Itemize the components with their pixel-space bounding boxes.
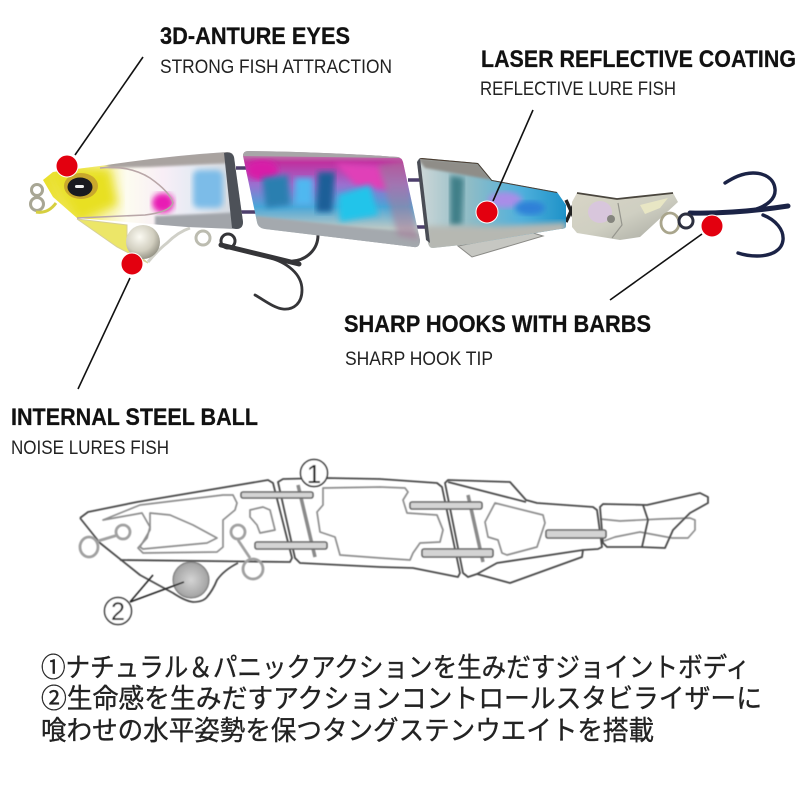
- eyelets: [80, 525, 263, 579]
- segment 3 outline: [445, 480, 602, 583]
- body segment 3: [417, 158, 566, 252]
- split ring front: [196, 231, 210, 245]
- tail segment: [572, 193, 678, 240]
- label 1: [300, 459, 328, 489]
- label 2 with leaders: 2: [111, 598, 125, 626]
- japanese description: ①ナチュラル＆パニックアクションを生みだすジョイントボディ: [41, 653, 750, 683]
- callout: laser coating: [476, 46, 796, 223]
- steel ball: [126, 225, 160, 259]
- callout: 3D eyes: STRONG FISH ATTRACTION: [160, 57, 392, 78]
- body segment 1: [43, 150, 245, 232]
- label 2 with leaders: [104, 575, 184, 626]
- lure photo: [30, 146, 788, 309]
- eye: [64, 173, 98, 199]
- segment 1 outline: [80, 480, 292, 602]
- callout: sharp hooks: SHARP HOOKS WITH BARBS: [344, 311, 651, 338]
- callout: sharp hooks: [344, 215, 723, 370]
- nose eyelet: [30, 184, 56, 212]
- weight ball: [173, 562, 209, 598]
- callout: 3D eyes: [56, 23, 392, 177]
- segment 2 outline: [278, 478, 460, 577]
- rear treble hook: [690, 173, 788, 256]
- joint rods: [236, 168, 576, 227]
- rear split rings: [661, 213, 693, 233]
- tail outline: [600, 493, 708, 548]
- clear lip and wire: [77, 219, 190, 263]
- callout: steel ball: INTERNAL STEEL BALL: [11, 404, 258, 431]
- joint rods: [241, 485, 606, 562]
- callout: 3D eyes: 3D-ANTURE EYES: [160, 23, 350, 50]
- callout: laser coating: REFLECTIVE LURE FISH: [480, 79, 676, 100]
- japanese description: ②生命感を生みだすアクションコントロールスタビライザーに: [41, 684, 762, 714]
- lower rear fin: [458, 232, 543, 257]
- callout: sharp hooks: SHARP HOOK TIP: [345, 349, 493, 370]
- diagram: lure cross-section: [80, 459, 708, 626]
- front treble hook: [221, 234, 318, 309]
- callout: steel ball: NOISE LURES FISH: [11, 438, 169, 459]
- japanese description: [41, 653, 762, 746]
- callout: steel ball: [11, 253, 258, 459]
- body segment 2: [243, 146, 420, 250]
- japanese description: 喰わせの水平姿勢を保つタングステンウエイトを搭載: [41, 716, 654, 746]
- label 1: 1: [307, 459, 321, 489]
